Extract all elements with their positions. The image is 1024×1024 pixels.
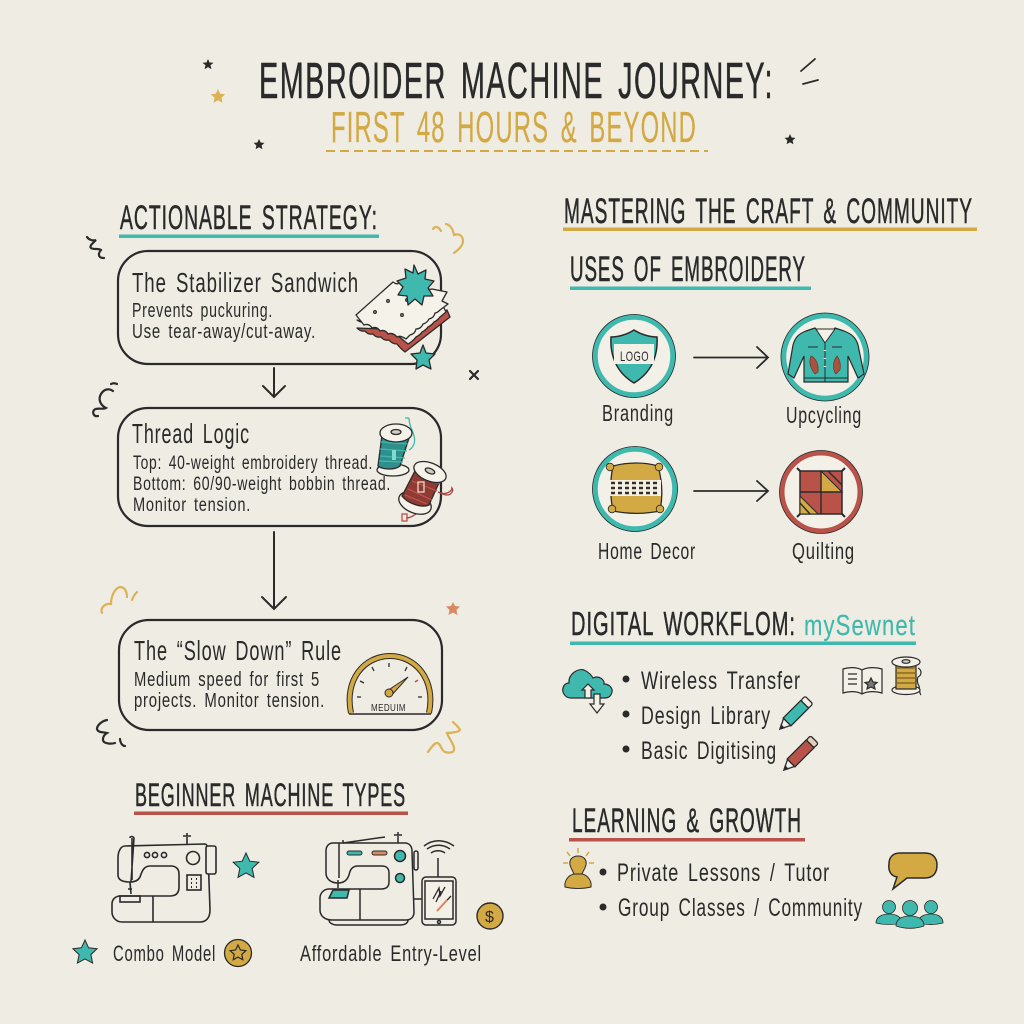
panel: thread logic: Thread Logic bbox=[132, 418, 250, 449]
label: combo model: Combo Model bbox=[113, 941, 216, 966]
icon: speech bubble bbox=[889, 853, 937, 889]
icon: gold thread spool bbox=[892, 657, 921, 695]
heading: actionable strategy: ACTIONABLE STRATEGY: bbox=[120, 199, 378, 237]
panel: the slow down rule bbox=[119, 620, 442, 730]
icon: group of people bbox=[876, 900, 943, 928]
label: combo model bbox=[73, 940, 252, 966]
panel: the slow down rule: Medium speed for first 5 bbox=[134, 669, 320, 691]
panel: the stabilizer sandwich: Prevents puckuring. bbox=[132, 300, 273, 322]
list: learning and growth bbox=[600, 859, 863, 922]
icon: design book bbox=[843, 668, 882, 694]
list: digital workflow: Design Library bbox=[641, 702, 771, 730]
heading: uses of embroidery: USES OF EMBROIDERY bbox=[570, 250, 806, 289]
icon: branding shield: LOGO bbox=[620, 348, 649, 364]
icon: upcycling jacket bbox=[781, 313, 869, 401]
icon: tutor idea person bbox=[563, 848, 594, 888]
heading: beginner machine types bbox=[134, 777, 408, 815]
heading: digital workflow mysewnet: DIGITAL WORKFLOM: bbox=[571, 605, 796, 642]
heading: learning and growth: LEARNING & GROWTH bbox=[572, 802, 802, 840]
decorative title stars and sparks bbox=[202, 59, 818, 149]
panel: thread logic: Top: 40-weight embroidery thread. bbox=[133, 453, 373, 474]
heading: beginner machine types: BEGINNER MACHINE TYPES bbox=[135, 777, 406, 813]
icon: red pencil bbox=[780, 736, 818, 774]
label: affordable entry-level: Affordable Entry-Level bbox=[300, 941, 482, 966]
icon: home decor cushion bbox=[592, 446, 678, 532]
list: learning and growth: Group Classes / Community bbox=[618, 894, 863, 922]
title: FIRST 48 HOURS & BEYOND bbox=[331, 103, 697, 152]
icon: stabilizer layers bbox=[356, 265, 450, 369]
panel: the stabilizer sandwich bbox=[118, 251, 450, 369]
icon: cloud transfer bbox=[563, 670, 612, 713]
icon: speed gauge bbox=[349, 656, 431, 714]
icon: dollar coin bbox=[477, 903, 503, 929]
list: digital workflow: Wireless Transfer bbox=[641, 667, 801, 695]
panel: the slow down rule: projects. Monitor tension. bbox=[134, 690, 325, 712]
icon: entry-level machine with tablet bbox=[320, 832, 456, 925]
arrow: thread to slow down bbox=[262, 532, 286, 609]
icon: teal thread spool bbox=[377, 418, 415, 476]
arrow: stabilizer to thread bbox=[263, 368, 285, 397]
panel: thread logic: Monitor tension. bbox=[133, 495, 251, 516]
arrow: home decor to quilting bbox=[694, 481, 768, 501]
heading: digital workflow mysewnet: mySewnet bbox=[804, 610, 916, 642]
icon: combo sewing machine bbox=[112, 833, 216, 922]
panel: thread logic bbox=[118, 408, 453, 526]
icon: star bullet bbox=[73, 940, 97, 963]
icon: teal pencil bbox=[776, 696, 813, 733]
icon: quilting block bbox=[780, 450, 862, 534]
label: home decor: Home Decor bbox=[598, 538, 696, 564]
panel: thread logic: Bottom: 60/90-weight bobbin thread. bbox=[133, 474, 391, 495]
panel: the slow down rule: The “Slow Down” Rule bbox=[134, 635, 342, 666]
decorative scribbles left column bbox=[87, 224, 478, 753]
list: digital workflow bbox=[622, 667, 801, 765]
panel: the stabilizer sandwich: The Stabilizer Sandwich bbox=[132, 267, 359, 298]
icon: red thread spool bbox=[395, 457, 453, 521]
heading: uses of embroidery bbox=[570, 250, 811, 290]
label: upcycling: Upcycling bbox=[786, 402, 862, 428]
panel: the stabilizer sandwich: Use tear-away/cut-away. bbox=[132, 321, 316, 343]
arrow: branding to upcycling bbox=[694, 347, 768, 368]
list: digital workflow: Basic Digitising bbox=[641, 737, 777, 765]
icon: teal star bbox=[233, 853, 259, 877]
title bbox=[259, 52, 774, 152]
heading: learning and growth bbox=[569, 802, 805, 842]
icon: speed gauge: MEDUIM bbox=[371, 703, 406, 714]
icon: branding shield bbox=[592, 314, 676, 398]
list: learning and growth: Private Lessons / Tutor bbox=[617, 859, 830, 887]
label: branding: Branding bbox=[602, 400, 674, 426]
heading: actionable strategy bbox=[119, 199, 379, 238]
icon: dollar coin: $ bbox=[485, 909, 495, 926]
label: quilting: Quilting bbox=[792, 538, 855, 564]
